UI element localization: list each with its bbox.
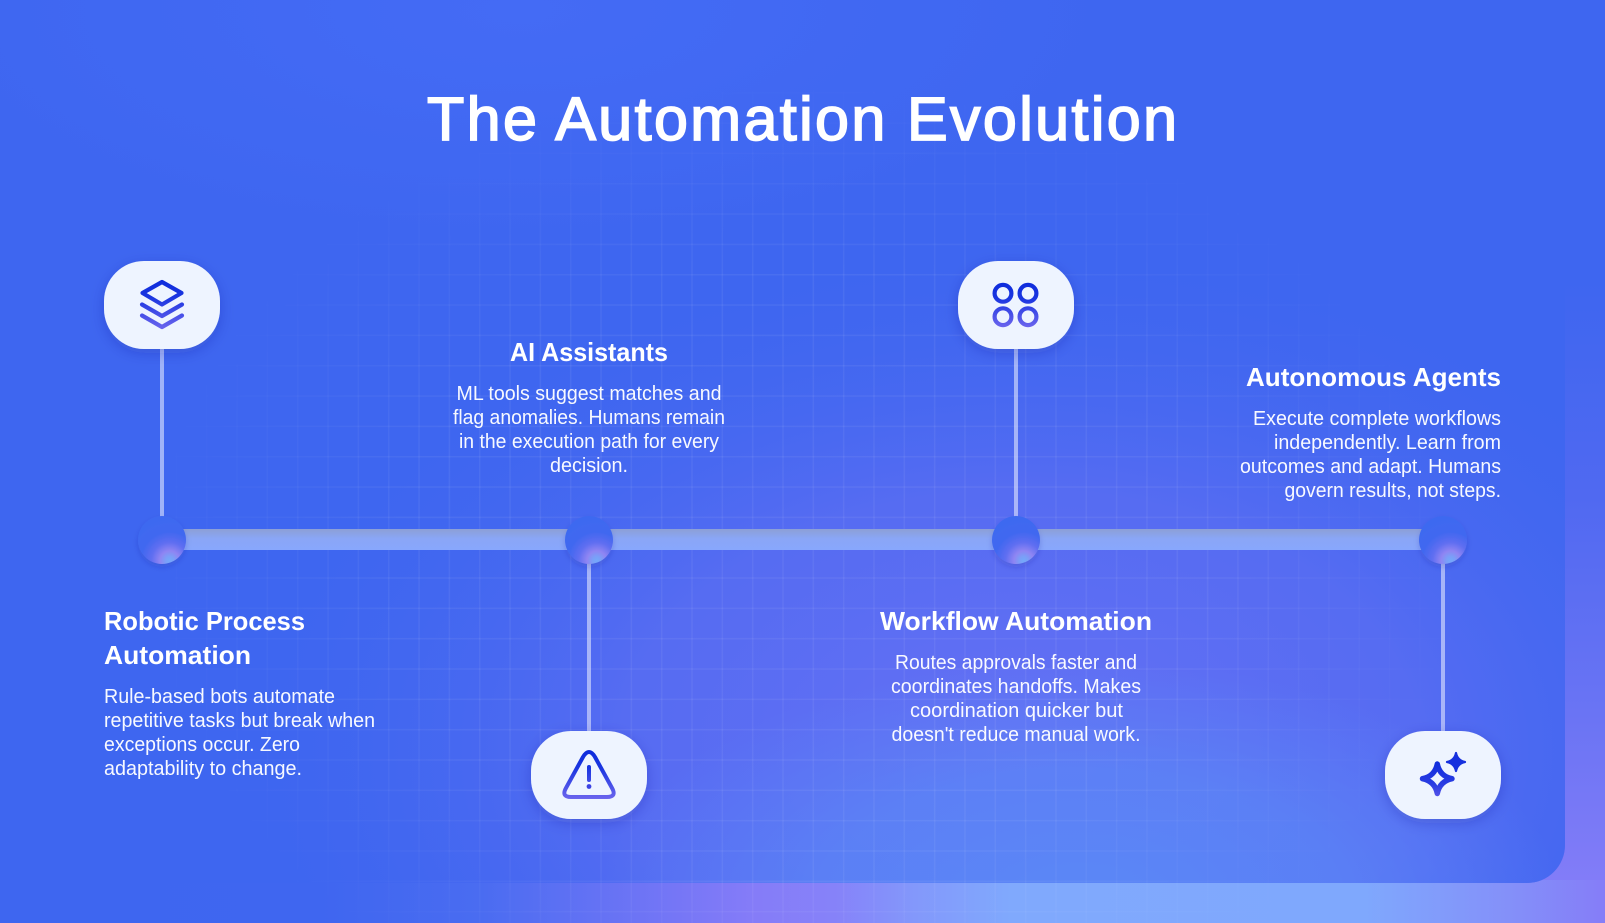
description: Robotic Process Automation: Rule-based bots automate [104,686,335,708]
description: Autonomous Agents: outcomes and adapt. Humans [1240,456,1501,478]
description: Workflow Automation [891,652,1141,746]
description: Robotic Process Automation: repetitive tasks but break when [104,710,375,732]
heading: Workflow Automation: Workflow Automation [880,606,1152,636]
description: AI Assistants: ML tools suggest matches and [456,383,722,405]
panel: gradient backdrop [452,378,1565,883]
description: Workflow Automation: doesn't reduce manual work. [892,724,1140,746]
description: Autonomous Agents: govern results, not steps. [1284,480,1501,502]
heading: Robotic Process Automation [104,606,305,670]
node: step 3 [992,516,1040,564]
text block: Robotic Process Automation [104,606,375,780]
icon: four circles [995,285,1036,325]
description: Workflow Automation: coordinates handoffs. Makes [891,676,1141,698]
description: Robotic Process Automation: exceptions occur. Zero [104,734,300,756]
node: step 1 [138,516,186,564]
connector: step 2 [587,560,591,735]
description: AI Assistants: in the execution path for every [459,431,719,453]
description: Autonomous Agents: independently. Learn from [1274,432,1501,454]
text block: Workflow Automation [880,606,1152,746]
icon card: sparkles [1385,731,1501,819]
icon card: warning [531,731,647,819]
connector: step 1 [160,345,164,520]
heading: Robotic Process Automation: Automation [104,640,251,670]
icon: layers [142,282,182,327]
description: Autonomous Agents [1240,408,1501,502]
icon: sparkles [1422,753,1465,794]
description: Robotic Process Automation [104,686,375,780]
icon: warning triangle [564,752,614,797]
node: step 2 [565,516,613,564]
description: AI Assistants: flag anomalies. Humans remain [453,407,725,429]
heading: Robotic Process Automation: Robotic Process [104,606,305,636]
heading: AI Assistants: AI Assistants [510,337,668,367]
description: Workflow Automation: Routes approvals faster and [895,652,1137,674]
description: Autonomous Agents: Execute complete workflows [1253,408,1501,430]
description: Workflow Automation: coordination quicker but [910,700,1123,722]
node: step 4 [1419,516,1467,564]
text block: Autonomous Agents [1240,362,1501,502]
icon card: layers [104,261,220,349]
icon card: circles [958,261,1074,349]
description: AI Assistants: decision. [550,455,628,477]
connector: step 4 [1441,560,1445,735]
text block: AI Assistants [453,337,725,477]
description: Robotic Process Automation: adaptability to change. [104,758,302,780]
title: The Automation Evolution [427,85,1177,153]
timeline bar [162,529,1443,550]
description: AI Assistants [453,383,725,477]
heading: Autonomous Agents: Autonomous Agents [1246,362,1501,392]
connector: step 3 [1014,345,1018,520]
